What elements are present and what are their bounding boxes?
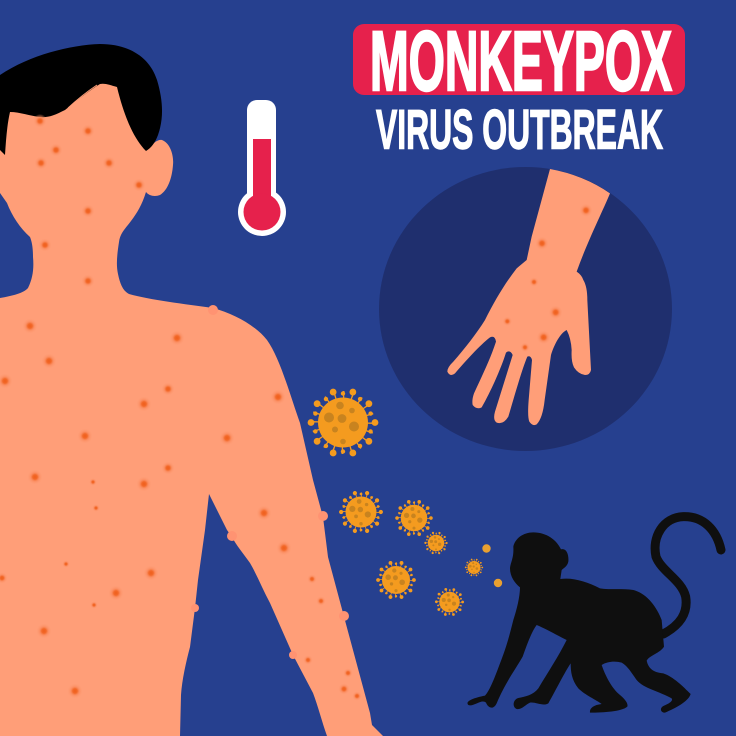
icon: thermometer (238, 100, 286, 236)
icon: monkey silhouette (467, 517, 721, 713)
panel: hand with rash (379, 167, 672, 451)
monkey body (467, 532, 691, 713)
hand (447, 169, 610, 425)
body skin (0, 80, 383, 736)
skin bumps (191, 305, 349, 659)
hair (0, 44, 162, 155)
icon: virus cluster (311, 390, 502, 615)
person silhouette with rash (0, 44, 383, 736)
hand spots (502, 203, 593, 352)
hair highlight (68, 85, 97, 108)
monkey tail (655, 517, 721, 634)
rash spots (0, 114, 362, 701)
circle backdrop (379, 167, 672, 451)
